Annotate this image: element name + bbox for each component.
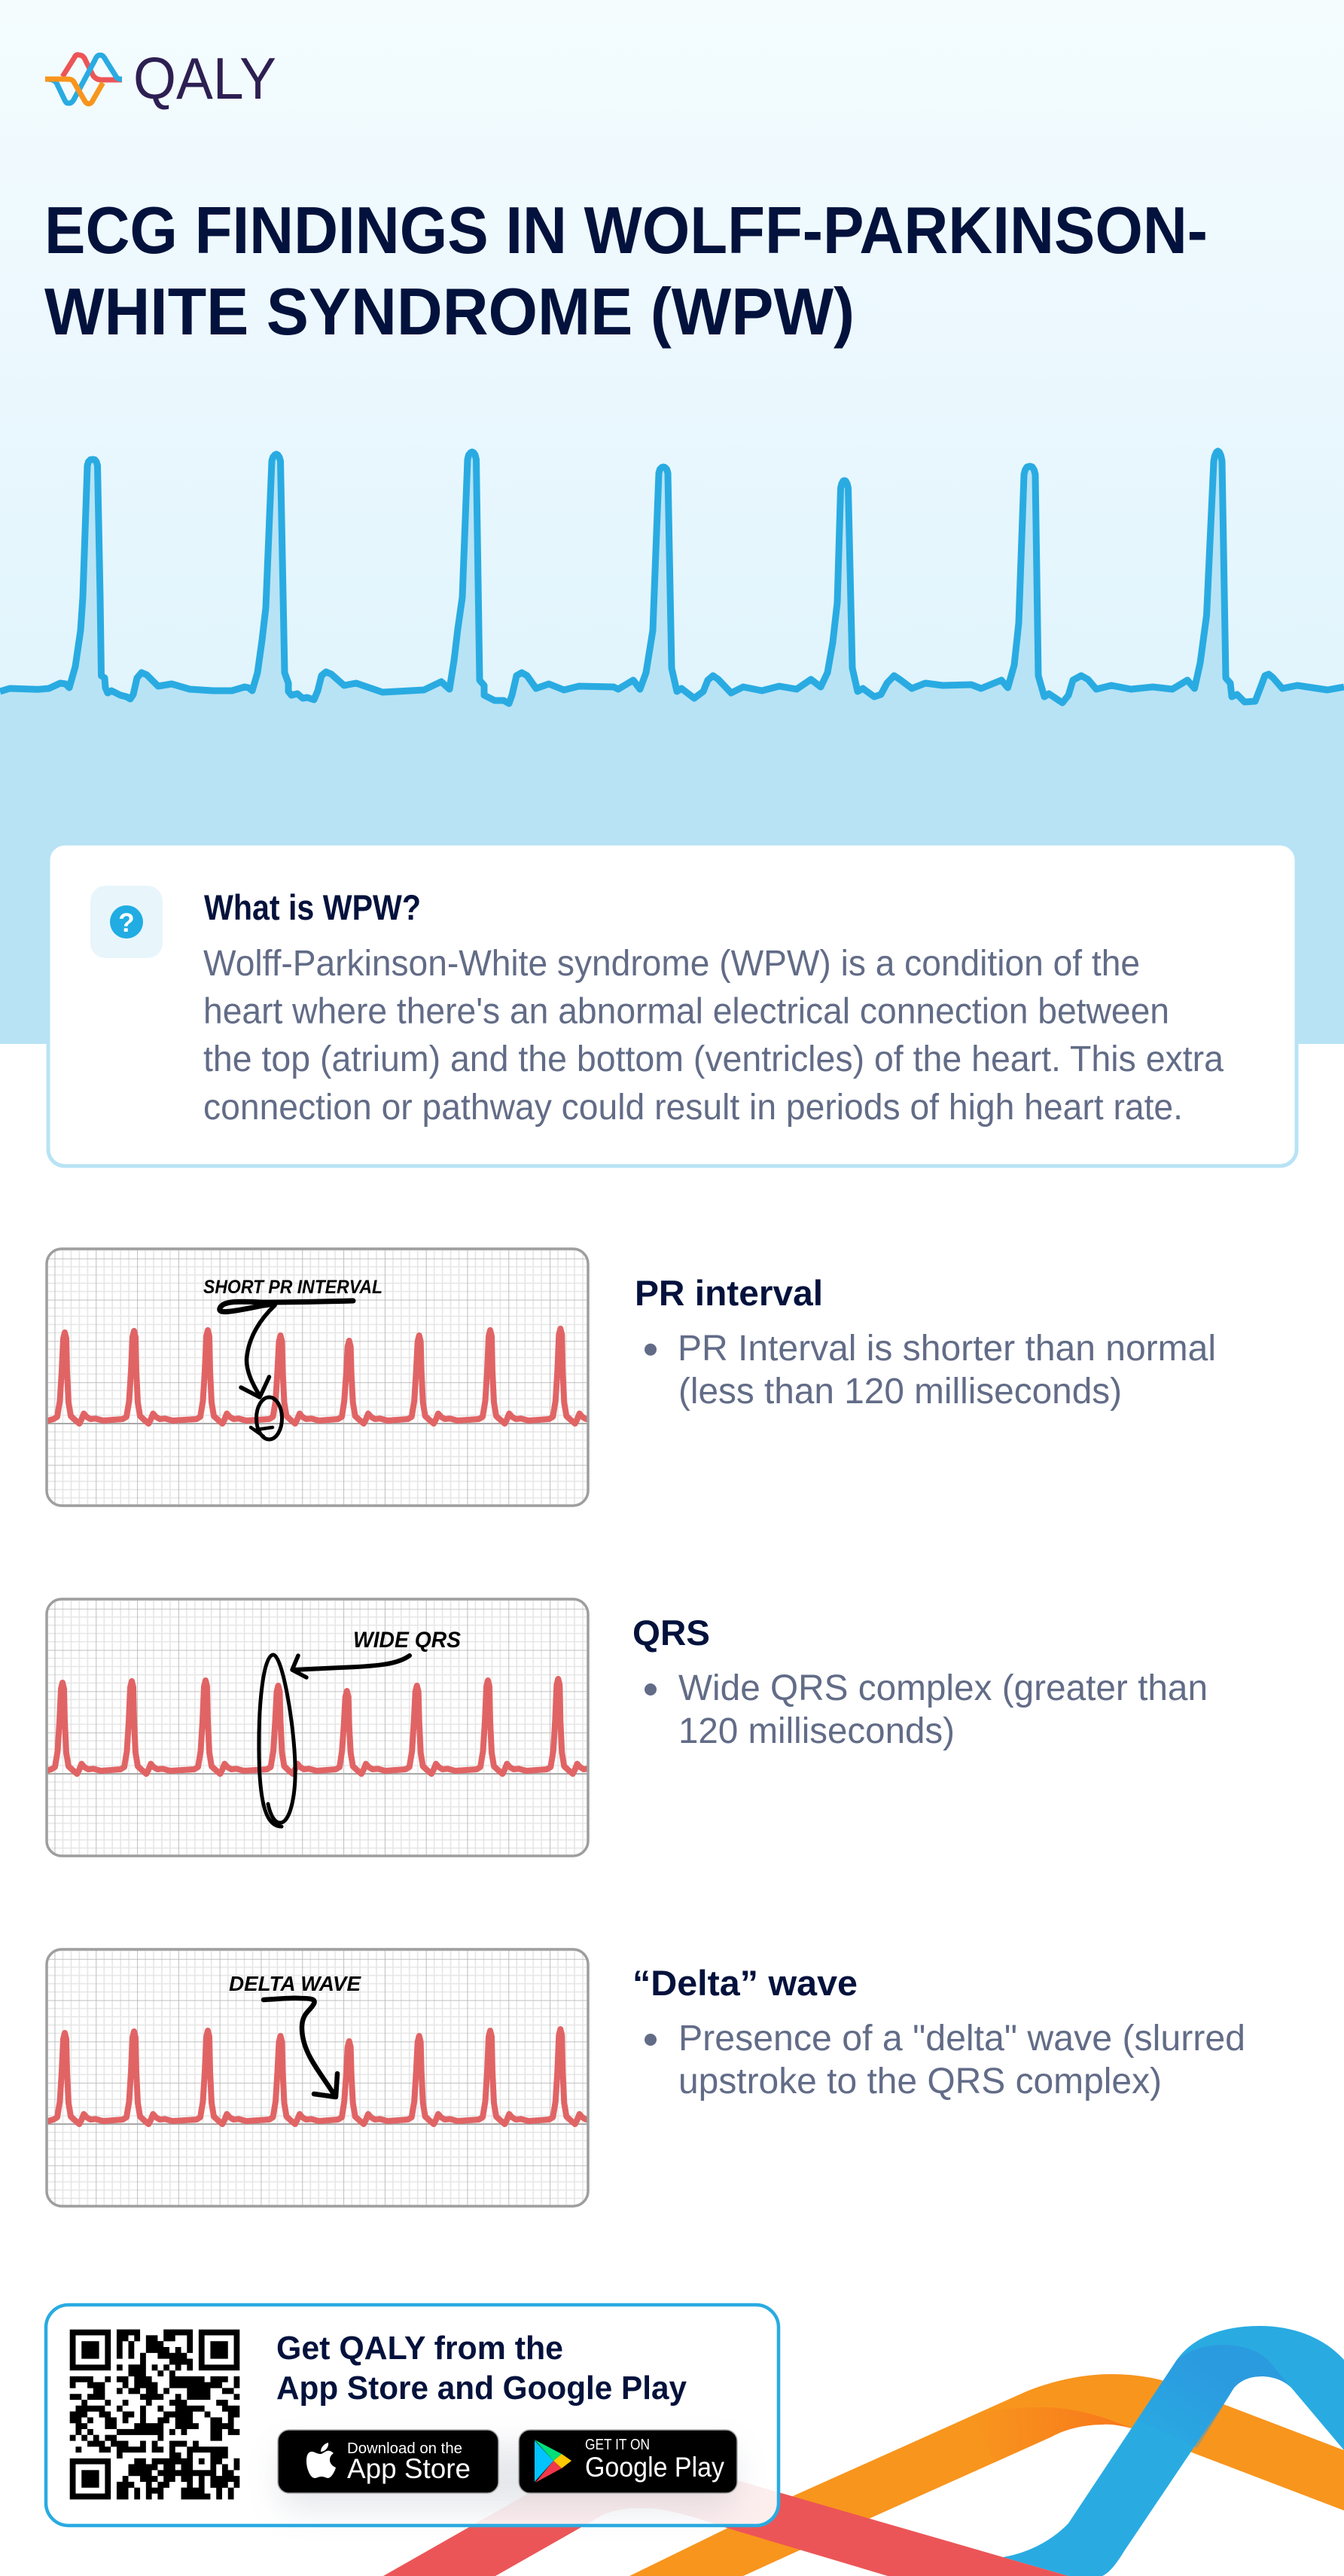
text block: delta wave bullet: Presence of a "delta" wave (slurred — [678, 2019, 1245, 2059]
text block: WPW definition: heart where there's an abnormal electrical connection between — [203, 991, 1169, 1032]
heading: get QALY: App Store and Google Play — [276, 2370, 687, 2407]
text block: WPW definition: Wolff-Parkinson-White syndrome (WPW) is a condition of the — [203, 944, 1140, 984]
title: WHITE SYNDROME (WPW) — [44, 274, 855, 349]
button: App Store: App Store — [347, 2453, 471, 2484]
logo: QALY: QALY — [133, 45, 276, 111]
hero ECG chart — [0, 451, 1344, 1044]
text block: WPW definition: connection or pathway could result in periods of high heart rate. — [203, 1088, 1183, 1128]
button: App Store: Download on the — [347, 2440, 462, 2457]
text block: QRS bullet: Wide QRS complex (greater than — [678, 1668, 1208, 1708]
button: App Store — [278, 2430, 498, 2493]
logo: QALY — [45, 45, 276, 111]
button: Google Play: Google Play — [585, 2452, 724, 2483]
heading: get QALY — [276, 2330, 687, 2407]
title — [44, 193, 1208, 349]
button: Google Play: GET IT ON — [585, 2437, 650, 2453]
text block: PR interval bullet: PR Interval is shorter than normal — [678, 1329, 1216, 1369]
heading: QRS: QRS — [632, 1613, 710, 1653]
text block: WPW definition — [203, 944, 1224, 1128]
panel: ECG strip delta wave — [45, 1949, 591, 2206]
button: Google Play — [519, 2430, 737, 2493]
heading: delta wave: “Delta” wave — [632, 1963, 858, 2003]
text block: delta wave bullet: upstroke to the QRS complex) — [678, 2062, 1162, 2101]
heading: PR interval: PR interval — [635, 1273, 823, 1313]
icon: apple — [306, 2443, 336, 2478]
decorative logo ribbons — [383, 2326, 1344, 2576]
title: ECG FINDINGS IN WOLFF-PARKINSON- — [44, 193, 1208, 267]
panel: what is WPW — [48, 844, 1297, 1166]
background: hero gradient — [0, 0, 1344, 1044]
annotation: delta wave — [229, 1972, 361, 2097]
annotation: short PR interval — [203, 1277, 382, 1439]
annotation: wide QRS: WIDE QRS — [353, 1628, 461, 1653]
annotation: wide QRS — [259, 1628, 461, 1827]
heading: what is WPW: What is WPW? — [204, 887, 421, 927]
text block: QRS bullet — [645, 1668, 1208, 1751]
heading: get QALY: Get QALY from the — [276, 2330, 563, 2367]
panel: get QALY app download — [46, 2305, 779, 2526]
panel: ECG strip short PR interval — [45, 1249, 591, 1506]
text block: QRS bullet: 120 milliseconds) — [678, 1711, 955, 1751]
text block: delta wave bullet — [645, 2019, 1245, 2101]
text block: PR interval bullet: (less than 120 milliseconds) — [678, 1372, 1122, 1412]
text block: WPW definition: the top (atrium) and the bottom (ventricles) of the heart. This extra — [203, 1039, 1224, 1079]
panel: ECG strip wide QRS — [43, 1599, 589, 1856]
icon: question mark — [90, 886, 163, 958]
icon: question mark: ? — [118, 908, 135, 938]
QR code — [70, 2330, 239, 2499]
text block: PR interval bullet — [645, 1329, 1216, 1412]
annotation: short PR interval: SHORT PR INTERVAL — [203, 1277, 382, 1298]
annotation: delta wave: DELTA WAVE — [229, 1972, 361, 1995]
icon: play triangle — [535, 2440, 571, 2483]
